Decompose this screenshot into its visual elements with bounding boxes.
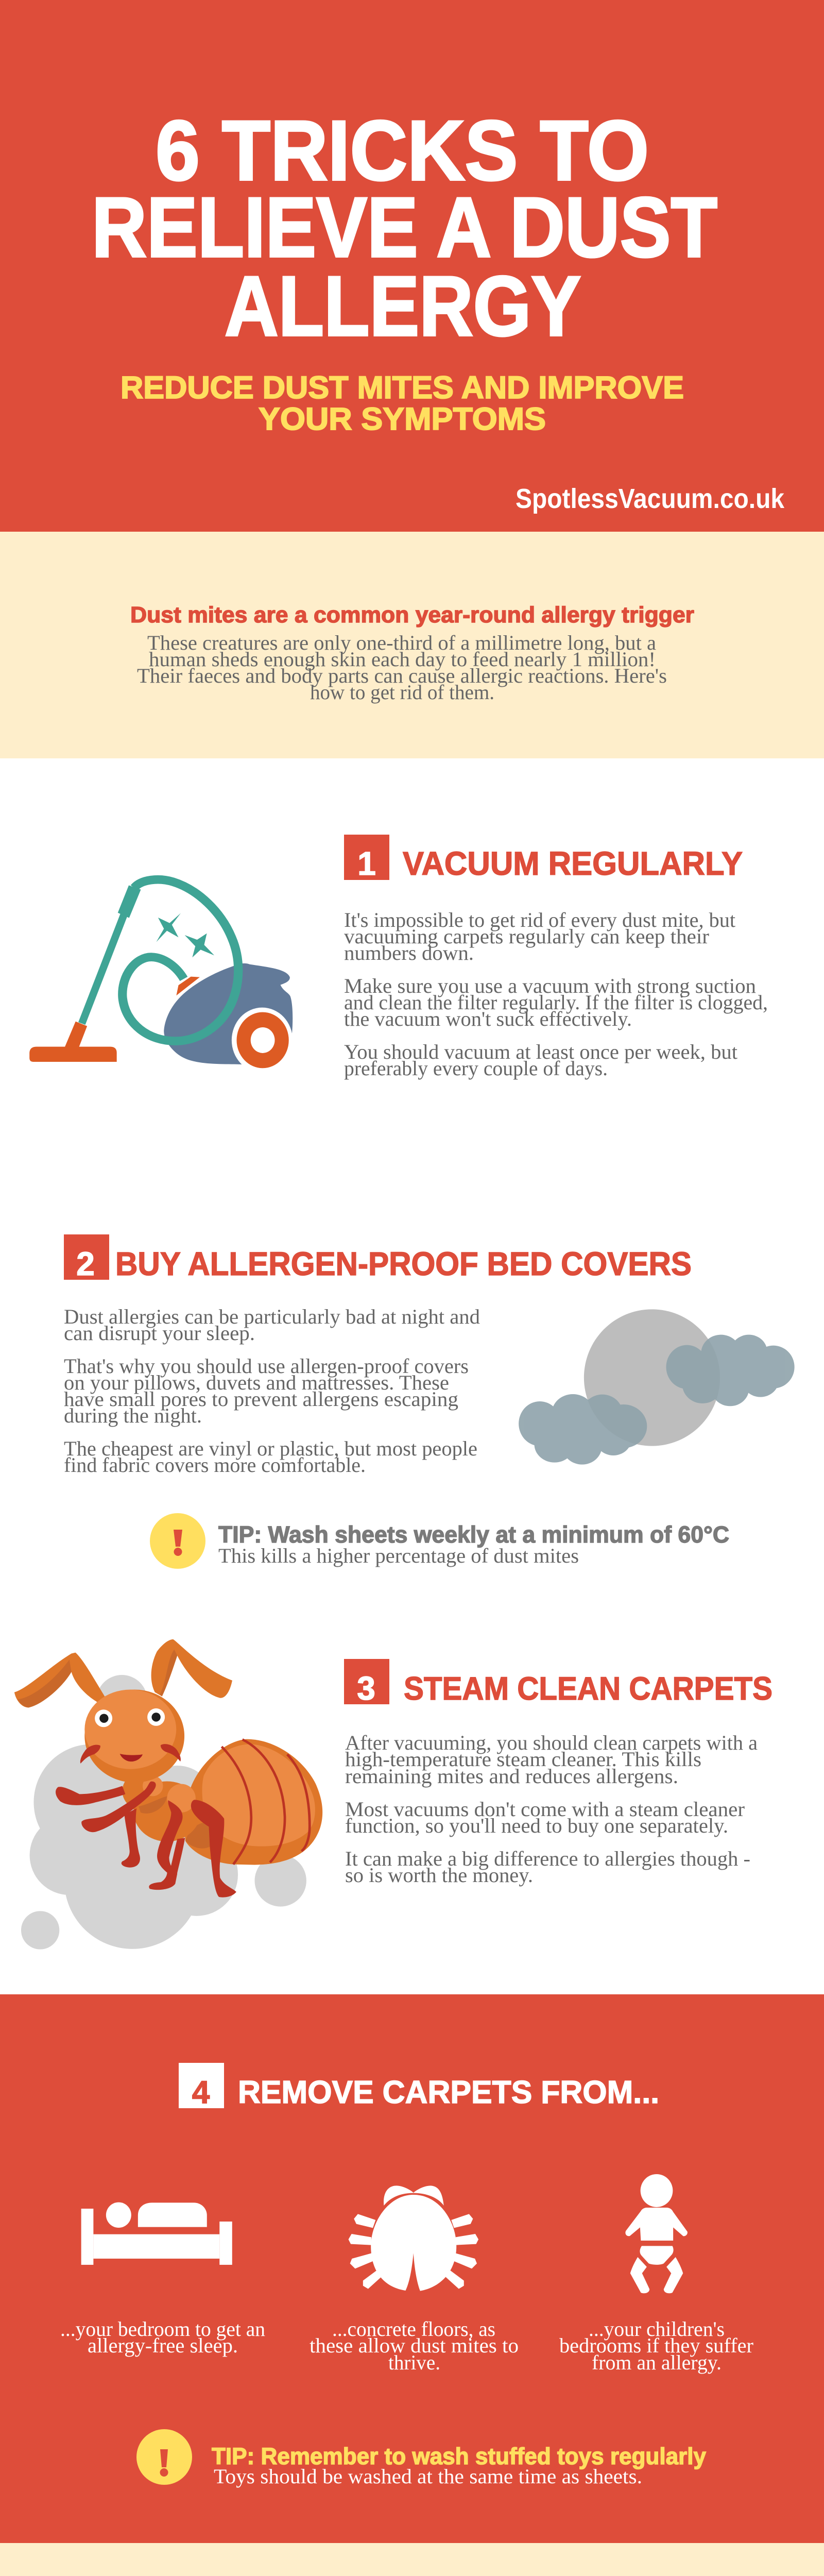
icon: baby (625, 2174, 688, 2293)
callout: tip stuffed toys (136, 2429, 706, 2488)
title: 6 TRICKS TO (156, 103, 649, 198)
intro text: how to get rid of them. (310, 681, 494, 704)
title: RELIEVE A DUST (92, 180, 717, 275)
text: concrete floors column (310, 2317, 519, 2374)
text block: have small pores to prevent allergens escaping (64, 1387, 458, 1411)
tip heading: TIP: Wash sheets weekly at a minimum of 60°C (218, 1521, 729, 1548)
text block: numbers down. (344, 941, 474, 964)
text block: That's why you should use allergen-proof covers (64, 1354, 469, 1378)
number badge 2 (64, 1234, 109, 1282)
text block: The cheapest are vinyl or plastic, but most people (64, 1437, 477, 1460)
number badge 2: 2 (76, 1245, 95, 1282)
text block: function, so you'll need to buy one separately. (345, 1814, 728, 1837)
text: concrete floors column: ...concrete floors, as (332, 2317, 495, 2341)
icon: bed (81, 2202, 232, 2265)
heading: remove carpets: REMOVE CARPETS FROM... (238, 2075, 659, 2110)
text: children's bedrooms column: ...your children's (589, 2317, 725, 2341)
intro text: These creatures are only one-third of a millimetre long, but a (147, 631, 656, 654)
number badge 1: 1 (357, 845, 376, 882)
tip text: Toys should be washed at the same time as sheets. (214, 2465, 642, 2488)
number badge 3: 3 (357, 1670, 375, 1707)
intro heading: Dust mites are a common year-round allergy trigger (130, 602, 694, 628)
icon: warning circle (136, 2429, 192, 2485)
panel: intro (0, 532, 824, 758)
panel: tip 3 steam clean (14, 1639, 772, 1950)
intro text: human sheds enough skin each day to feed nearly 1 million! (149, 648, 656, 671)
panel: tip 5 hepa vacuum (0, 2543, 824, 2576)
number badge 4 (179, 2063, 224, 2110)
text block: on your pillows, duvets and mattresses. These (64, 1371, 449, 1394)
icon: moon and clouds (519, 1309, 795, 1465)
subtitle: YOUR SYMPTOMS (259, 401, 546, 436)
text block: Make sure you use a vacuum with strong suction (344, 974, 756, 997)
subtitle (121, 370, 684, 436)
icon: bug (349, 2185, 478, 2291)
text: bedroom column (60, 2317, 265, 2357)
number badge 1 (344, 835, 389, 882)
text block: It can make a big difference to allergies though - (345, 1847, 750, 1870)
text: children's bedrooms column (559, 2317, 753, 2374)
callout: tip wash sheets (150, 1513, 729, 1569)
intro text (137, 631, 667, 704)
text: concrete floors column: these allow dust mites to (310, 2334, 519, 2357)
text: bedroom column: allergy-free sleep. (88, 2334, 238, 2357)
tip text: This kills a higher percentage of dust mites (218, 1544, 579, 1567)
text block: and clean the filter regularly. If the filter is clogged, (344, 991, 768, 1014)
number badge 4: 4 (192, 2075, 210, 2110)
intro text: Their faeces and body parts can cause allergic reactions. Here's (137, 664, 667, 687)
number badge 3 (344, 1659, 389, 1707)
text block: the vacuum won't suck effectively. (344, 1007, 632, 1030)
icon: vacuum cleaner (29, 879, 293, 1073)
text block: It's impossible to get rid of every dust mite, but (344, 908, 735, 931)
text block: Dust allergies can be particularly bad at night and (64, 1305, 480, 1328)
text: children's bedrooms column: bedrooms if they suffer (559, 2334, 753, 2357)
text block: vacuuming carpets regularly can keep their (344, 925, 709, 948)
text block: can disrupt your sleep. (64, 1321, 255, 1345)
subtitle: REDUCE DUST MITES AND IMPROVE (121, 370, 684, 405)
icons: bed, bug and baby (81, 2174, 688, 2293)
panel: tip 1 vacuum regularly (29, 835, 768, 1080)
panel: hero (0, 0, 824, 532)
panel: tip 4 remove carpets (0, 1994, 824, 2543)
title: ALLERGY (225, 259, 581, 353)
text block: remaining mites and reduces allergens. (345, 1765, 678, 1788)
text block: so is worth the money. (345, 1863, 533, 1887)
text: children's bedrooms column: from an allergy. (592, 2351, 722, 2374)
illustration: dust mite on dust cloud (14, 1639, 322, 1950)
icon: warning circle (150, 1513, 205, 1569)
text block (64, 1305, 480, 1477)
text block (345, 1731, 758, 1887)
panel: tip 2 bed covers (64, 1234, 795, 1477)
heading: bed covers: BUY ALLERGEN-PROOF BED COVERS (115, 1245, 692, 1282)
heading: vacuum regularly: VACUUM REGULARLY (403, 845, 743, 882)
text block: After vacuuming, you should clean carpets with a (345, 1731, 758, 1754)
text block: Most vacuums don't come with a steam cleaner (345, 1798, 745, 1821)
text block (344, 908, 768, 1080)
text block: preferably every couple of days. (344, 1057, 608, 1080)
text block: during the night. (64, 1404, 202, 1427)
text block: find fabric covers more comfortable. (64, 1453, 366, 1477)
title (92, 103, 717, 353)
brand url: SpotlessVacuum.co.uk (516, 483, 785, 514)
tip heading: TIP: Remember to wash stuffed toys regularly (212, 2443, 706, 2469)
text block: You should vacuum at least once per week, but (344, 1040, 737, 1063)
text: bedroom column: ...your bedroom to get an (60, 2317, 265, 2341)
text block: high-temperature steam cleaner. This kills (345, 1748, 701, 1771)
heading: steam clean carpets: STEAM CLEAN CARPETS (404, 1671, 772, 1707)
text: concrete floors column: thrive. (388, 2351, 440, 2374)
